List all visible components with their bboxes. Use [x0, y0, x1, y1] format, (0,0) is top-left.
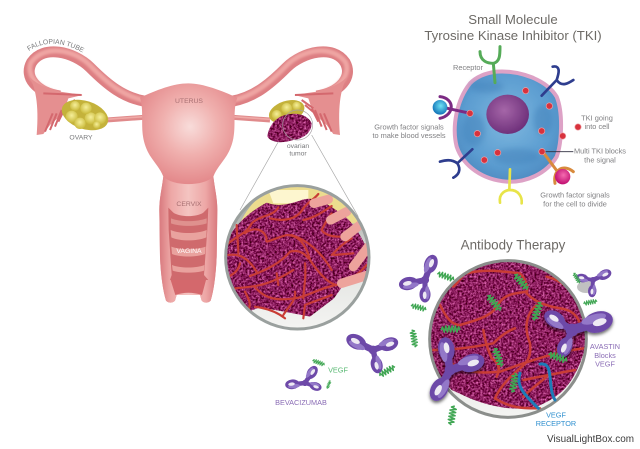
tumor tissue: [223, 199, 373, 317]
label: VEGF receptor: VEGF: [546, 410, 566, 420]
cell body: [455, 71, 561, 182]
VEGF receptors: [519, 364, 555, 408]
label: uterus: UTERUS: [175, 98, 203, 105]
right ovary: [266, 96, 307, 127]
label: vagina: VAGINA: [176, 248, 202, 255]
navy receptor upper: [542, 66, 573, 96]
label: Avastin blocks VEGF: Blocks: [594, 351, 616, 360]
label: multi TKI: the signal: [584, 156, 616, 164]
antibody: blocking right: [541, 307, 616, 360]
vaginal folds: [168, 208, 208, 280]
green receptor: [480, 47, 500, 83]
TKI cell annotations: [372, 63, 626, 208]
watermark: VisualLightBox.com: [547, 434, 634, 445]
reproductive anatomy diagram: [29, 51, 358, 303]
purple receptor with blue growth factor: [433, 97, 470, 118]
ovarian tumor: [267, 114, 312, 142]
yellow receptor: [500, 169, 522, 203]
VEGF molecules: [312, 271, 597, 425]
antibody: upper right free: [575, 267, 613, 297]
label: Avastin blocks VEGF: VEGF: [595, 360, 615, 368]
label: TKI going into cell: TKI going: [581, 114, 613, 122]
label: ovary: OVARY: [69, 134, 93, 142]
navy receptor lower: [440, 149, 472, 178]
TKI cell diagram: [433, 47, 581, 203]
heading: antibody therapy: Antibody Therapy: [461, 238, 566, 252]
tumor tissue: [427, 259, 588, 409]
blood vessels: [433, 268, 583, 408]
antibody: blocking left: [426, 336, 487, 404]
antibody: legend: [285, 364, 323, 392]
label: bevacizumab: BEVACIZUMAB: [275, 398, 327, 407]
fimbria fingers: [314, 199, 368, 283]
label: multi TKI: Multi TKI blocks: [574, 146, 626, 156]
label: receptor: Receptor: [453, 63, 484, 72]
fallopian fat tissue: [240, 186, 360, 223]
label: ovarian tumor: tumor: [289, 150, 307, 158]
label: VEGF receptor: RECEPTOR: [536, 419, 576, 428]
left ovary: [58, 94, 112, 136]
label: blood vessel signals: Growth factor signals: [374, 122, 444, 132]
blood vessels: [228, 194, 367, 318]
label: ovarian tumor: ovarian: [287, 143, 309, 150]
label: VEGF: VEGF: [328, 366, 348, 374]
cytoplasm mottling: [462, 81, 553, 165]
orange receptor with pink growth factor: [543, 152, 573, 184]
leader line: [543, 150, 573, 153]
label: blood vessel signals: to make blood vessels: [372, 131, 446, 140]
left fallopian tube: [29, 51, 145, 135]
heading: small molecule TKI: Small Molecule: [468, 12, 558, 27]
label: cervix: CERVIX: [176, 201, 202, 208]
label: cell division signals: for the cell to divide: [543, 200, 607, 208]
antibody therapy circle: [427, 259, 588, 417]
magnifier lines: [240, 110, 358, 217]
nucleus: [486, 95, 529, 134]
label: TKI going into cell: into cell: [584, 122, 610, 131]
TKI molecules: [467, 87, 581, 163]
magnified tumor inset: [223, 186, 373, 329]
label: fallopian tube: FALLOPIAN TUBE: [26, 39, 84, 52]
right fallopian tube: [232, 51, 347, 135]
label: cell division signals: Growth factor signals: [540, 190, 610, 200]
antibody: upper left free: [398, 253, 440, 303]
antibody therapy labels: [275, 342, 620, 428]
uterus and vaginal canal: [140, 83, 237, 303]
anatomy labels: [26, 39, 309, 255]
antibody: centre free: [344, 331, 400, 375]
label: Avastin blocks VEGF: AVASTIN: [590, 342, 620, 351]
vaginal opening: [171, 280, 206, 295]
heading: small molecule TKI: Tyrosine Kinase Inhibitor (TKI): [424, 28, 602, 43]
